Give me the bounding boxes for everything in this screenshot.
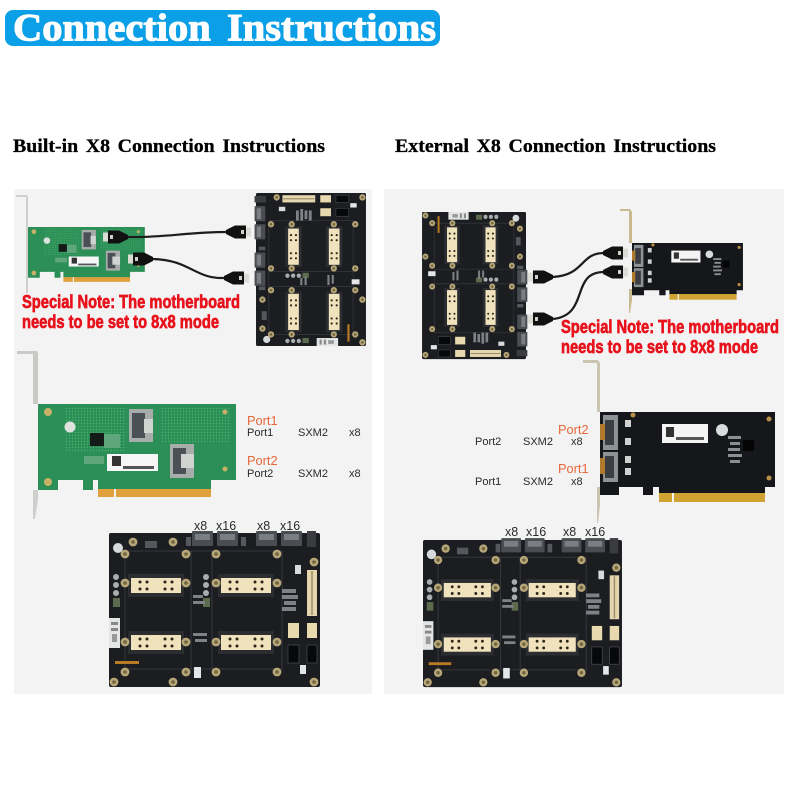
- port table: built-in: Port2: [247, 468, 273, 480]
- panel: built-in X8: [14, 189, 372, 694]
- cables: built-in: [103, 226, 251, 284]
- bracket of large green card: [17, 351, 38, 519]
- port table: built-in: Port2: [247, 453, 278, 468]
- port width labels: built-in: x8: [194, 519, 207, 533]
- special note: built-in: [22, 291, 240, 332]
- port table: external: Port1: [558, 461, 589, 476]
- portrait backplane board: external: [422, 212, 527, 359]
- title banner: Connection Instructions: [13, 6, 436, 50]
- port table: external: Port1: [475, 476, 501, 488]
- port table: external: SXM2: [523, 436, 553, 448]
- port table: external: SXM2: [523, 476, 553, 488]
- bracket of large black card: [583, 360, 600, 523]
- large black adapter card: [600, 412, 775, 502]
- port table: external: Port2: [558, 422, 589, 437]
- heading: built-in: Built-in X8 Connection Instructions: [13, 136, 325, 157]
- large green adapter card: [38, 404, 236, 497]
- port width labels: external: x16: [585, 525, 605, 539]
- special note: built-in: needs to be set to 8x8 mode: [22, 311, 219, 332]
- port table: external: x8: [571, 436, 583, 448]
- port width labels: built-in: x16: [216, 519, 236, 533]
- special note: external: [561, 316, 779, 357]
- port table: built-in: SXM2: [298, 468, 328, 480]
- port table: built-in: Port1: [247, 413, 278, 428]
- port width labels: external: x8: [505, 525, 518, 539]
- heading: external: External X8 Connection Instructions: [395, 136, 716, 157]
- port width labels: external: x16: [526, 525, 546, 539]
- backplane board: external: [423, 538, 622, 687]
- port width labels: external: [505, 525, 605, 539]
- port table: built-in: x8: [349, 468, 361, 480]
- port width labels: external: x8: [563, 525, 576, 539]
- small black adapter card: [632, 243, 743, 300]
- portrait backplane board: [255, 193, 366, 346]
- port table: built-in: x8: [349, 427, 361, 439]
- port width labels: built-in: x8: [257, 519, 270, 533]
- port width labels: built-in: x16: [280, 519, 300, 533]
- panel: external X8: [384, 189, 784, 694]
- port table: built-in: [247, 413, 361, 480]
- port width labels: built-in: [194, 519, 300, 533]
- backplane board: built-in: [109, 531, 320, 687]
- small bracket: [620, 209, 632, 313]
- special note: built-in: Special Note: The motherboard: [22, 291, 240, 312]
- port table: external: Port2: [475, 436, 501, 448]
- small green adapter card: [28, 227, 145, 282]
- port table: built-in: Port1: [247, 427, 273, 439]
- small green card bracket: [16, 195, 28, 293]
- port table: external: x8: [571, 476, 583, 488]
- port table: external: [475, 422, 589, 488]
- port table: built-in: SXM2: [298, 427, 328, 439]
- cables: external: [528, 246, 628, 326]
